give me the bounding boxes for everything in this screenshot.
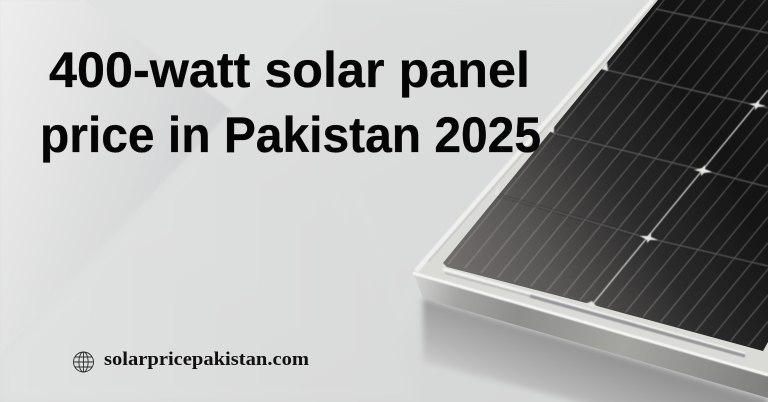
panel frame top <box>413 0 768 376</box>
title <box>40 42 541 163</box>
glass surface with cells <box>430 0 768 360</box>
centre divider <box>592 90 768 305</box>
frame notches <box>493 62 608 307</box>
title line 2: price in Pakistan 2025 <box>40 107 541 163</box>
title line 1: 400-watt solar panel <box>49 42 530 98</box>
icon: globe <box>74 352 94 372</box>
website footer <box>74 349 309 372</box>
row gaps <box>498 9 768 266</box>
frame highlights <box>413 0 768 375</box>
panel shadow on the ground <box>423 298 768 402</box>
website url: solarpricepakistan.com <box>104 349 309 370</box>
panel side face <box>413 272 768 398</box>
solar panel <box>413 0 768 402</box>
busbar finger lines <box>448 0 768 351</box>
cell junction glints <box>640 100 766 243</box>
next module corner <box>763 342 768 353</box>
